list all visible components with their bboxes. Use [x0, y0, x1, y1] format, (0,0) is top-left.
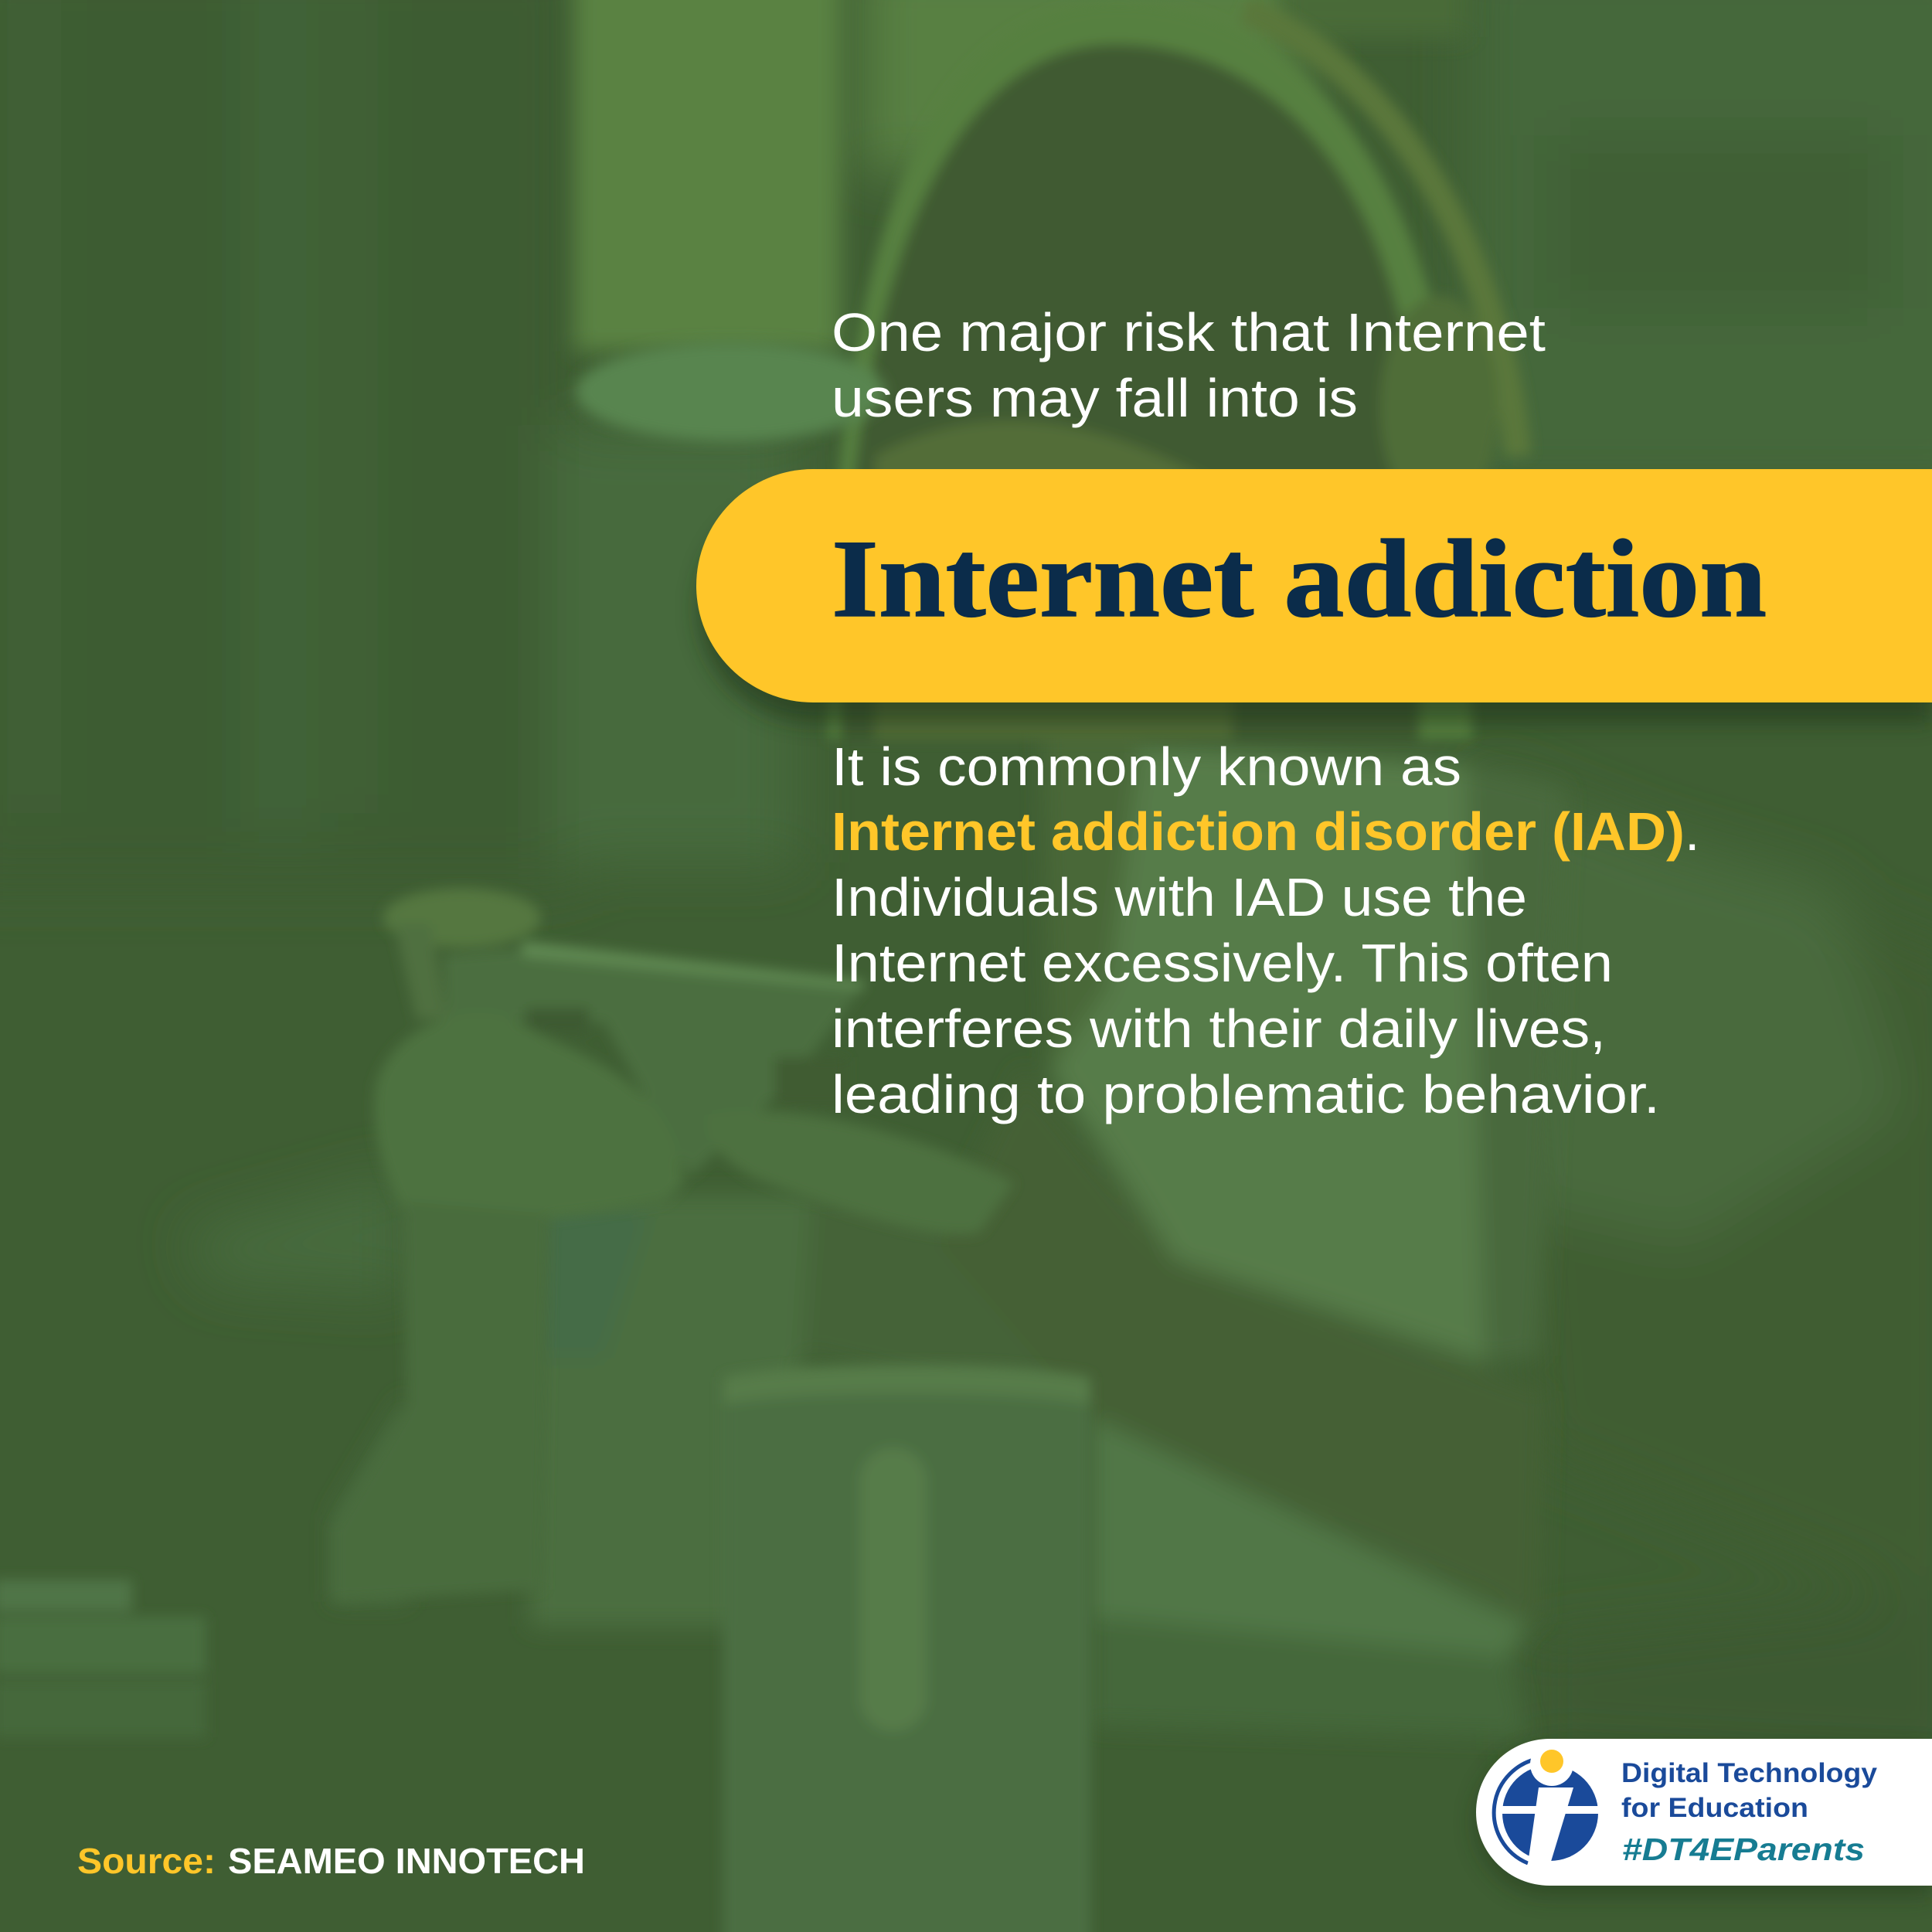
- hair and headphones: [828, 2, 1518, 740]
- intro line 2: users may fall into is: [832, 368, 1358, 428]
- logo panel shadow: [1475, 1748, 1932, 1897]
- headline: Internet addiction: [832, 518, 1767, 641]
- intro text: [832, 302, 1546, 428]
- logo text line 2: for Education: [1621, 1793, 1808, 1823]
- intro line 1: One major risk that Internet: [832, 302, 1546, 362]
- source name: SEAMEO INNOTECH: [228, 1841, 585, 1881]
- body line 2 with highlighted term: Internet addiction disorder (IAD): [832, 801, 1685, 862]
- body line 1: It is commonly known as: [832, 736, 1461, 797]
- lamp disc: [576, 342, 885, 441]
- body paragraph: [832, 736, 1699, 1124]
- icon: i logo: [1494, 1743, 1601, 1864]
- yellow banner: [696, 469, 1932, 702]
- hands holding the phone: [332, 889, 1014, 1602]
- notebook: [0, 1580, 206, 1737]
- body line 3: Individuals with IAD use the: [832, 867, 1527, 927]
- logo text line 1: Digital Technology: [1621, 1758, 1878, 1788]
- hashtag: #DT4EParents: [1622, 1832, 1865, 1867]
- body line 5: interferes with their daily lives,: [832, 998, 1606, 1059]
- coffee mug: [723, 1365, 1090, 1932]
- body line 4: Internet excessively. This often: [832, 933, 1613, 993]
- banner shadow: [699, 495, 1932, 723]
- body line 6: leading to problematic behavior.: [832, 1064, 1660, 1124]
- source label: Source:: [77, 1841, 216, 1881]
- period after highlighted term: .: [1685, 801, 1699, 862]
- logo panel: [1476, 1739, 1932, 1886]
- source credit: [77, 1841, 585, 1881]
